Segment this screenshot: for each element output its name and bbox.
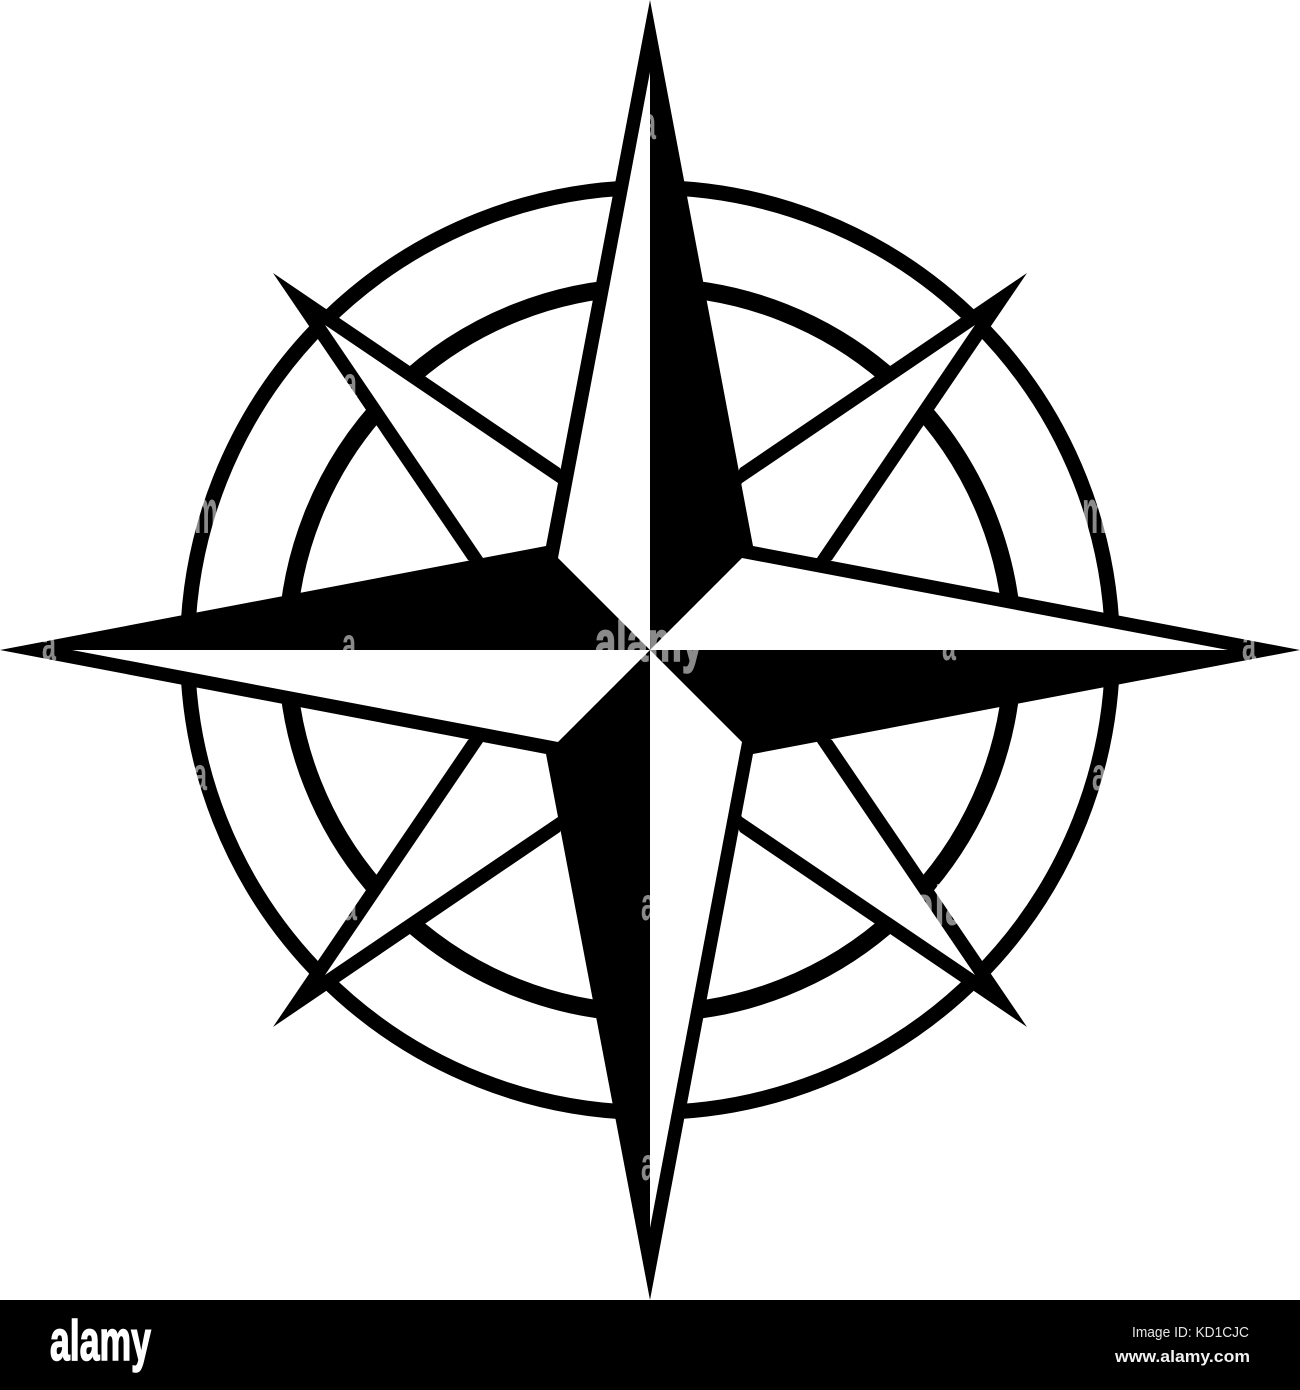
watermark fragments: alamy: [595, 610, 703, 674]
watermark fragments: a: [1092, 748, 1106, 800]
watermark fragments: [42, 97, 1256, 1190]
website: www.alamy.com: [1114, 1347, 1250, 1366]
watermark fragments: m: [1082, 478, 1107, 547]
watermark fragments: a: [343, 357, 357, 409]
watermark fragments: a: [42, 618, 56, 670]
watermark fragments: a: [641, 878, 655, 930]
diagonal point: north-east: [650, 273, 1027, 650]
south arm white facet: [650, 650, 742, 1228]
image id: Image ID: KD1CJC: [1132, 1324, 1249, 1341]
watermark fragments: a: [342, 618, 356, 670]
footer bar: [0, 1300, 1300, 1390]
watermark fragments: a: [193, 748, 207, 800]
watermark fragments: a: [942, 618, 956, 670]
west arm white facet: [72, 650, 650, 742]
watermark fragments: a: [641, 1138, 655, 1190]
diagonal point: north-west: [273, 273, 650, 650]
diagonal point: south-west: [273, 650, 650, 1027]
inner ring: [287, 287, 1013, 1013]
north arm white facet: [558, 72, 650, 650]
diagonal point: south-east: [650, 650, 1027, 1027]
outer ring: [188, 188, 1112, 1112]
watermark fragments: a: [1242, 618, 1256, 670]
watermark fragments: alam: [913, 874, 1000, 938]
footer logo: alamy: [50, 1309, 151, 1373]
east arm white facet: [650, 558, 1228, 650]
watermark fragments: m: [194, 478, 218, 547]
watermark fragments: a: [642, 97, 656, 149]
watermark fragments: a: [343, 878, 357, 930]
